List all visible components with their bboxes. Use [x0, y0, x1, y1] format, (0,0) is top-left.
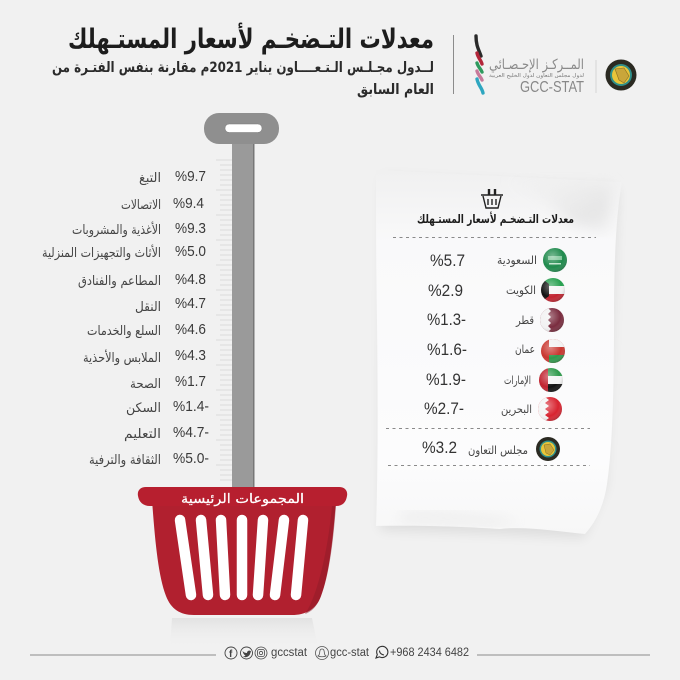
row: GCC total: مجلس التعاون — [468, 443, 528, 458]
phone number: +968 2434 6482 — [390, 647, 469, 659]
row: restaurants: %4.8 — [175, 271, 206, 288]
divider top — [393, 236, 596, 238]
row: communications: الاتصالات — [121, 198, 161, 213]
footer — [30, 646, 650, 660]
row: transport: %4.7 — [175, 295, 206, 312]
row: culture and recreation: الثقافة والترفية — [89, 453, 161, 468]
basket — [138, 487, 347, 615]
row: Bahrain: البحرين — [501, 402, 532, 417]
subtitle line 2: العام السابق — [357, 82, 434, 98]
handle gccstat: gccstat — [271, 647, 308, 659]
row: health — [130, 373, 206, 392]
header divider — [453, 35, 454, 94]
basket reflection — [170, 618, 318, 648]
basket body — [152, 500, 336, 615]
row: clothing: %4.3 — [175, 347, 206, 364]
icon: twitter — [240, 647, 252, 659]
category list — [42, 168, 209, 468]
icon: ribbon — [476, 36, 483, 93]
logo divider — [596, 60, 597, 93]
row: food and beverages: الأغذية والمشروبات — [72, 221, 161, 238]
divider bottom — [388, 464, 590, 466]
row: Oman — [427, 339, 565, 363]
row: transport — [135, 295, 206, 315]
row: housing: %1.4- — [173, 398, 209, 415]
handle gcc-stat: gcc-stat — [330, 647, 370, 659]
row: culture and recreation: %5.0- — [173, 450, 209, 467]
row: Oman: عمان — [515, 342, 535, 356]
row: Saudi Arabia: %5.7 — [430, 251, 465, 270]
icon: snapchat — [316, 646, 328, 660]
title: معدلات التـضخـم لأسعار المستـهلك — [68, 22, 434, 55]
scale handle — [204, 113, 279, 488]
row: food and beverages: %9.3 — [175, 220, 206, 237]
logo GCC-STAT: GCC-STAT — [520, 79, 584, 96]
row: goods and services: السلع والخدمات — [87, 324, 161, 339]
row: Qatar — [427, 308, 564, 332]
row: clothing — [83, 347, 206, 366]
row: Saudi Arabia: السعودية — [497, 253, 537, 268]
ruler ticks — [216, 160, 232, 480]
row: furniture: الأثاث والتجهيزات المنزلية — [42, 244, 161, 261]
row: communications: %9.4 — [173, 195, 204, 212]
logo sub name: لدول مجلس التعاون لدول الخليج العربية — [489, 73, 585, 79]
receipt paper — [376, 170, 622, 534]
icon: basket — [481, 189, 503, 208]
row: education: التعليم — [124, 427, 161, 442]
row: goods and services: %4.6 — [175, 321, 206, 338]
row: goods and services — [87, 321, 206, 339]
row: tobacco — [139, 168, 206, 186]
row: communications — [121, 195, 204, 213]
receipt title: معدلات التـضخـم لأسعار المستـهلك — [417, 211, 574, 226]
row: tobacco: %9.7 — [175, 168, 206, 185]
row: education — [124, 424, 209, 442]
row: clothing: الملابس والأحذية — [83, 349, 161, 366]
row: furniture: %5.0 — [175, 243, 206, 260]
divider middle — [386, 428, 590, 430]
row: restaurants — [78, 271, 206, 289]
row: culture and recreation — [89, 450, 209, 468]
header title block — [52, 22, 434, 98]
icon: GCC emblem — [606, 60, 636, 90]
icon: instagram — [255, 647, 267, 659]
receipt top fold shade — [500, 178, 612, 232]
basket rim — [138, 487, 347, 506]
icon: whatsapp — [376, 646, 388, 658]
row: Qatar: %1.3- — [427, 310, 466, 329]
row: Qatar: قطر — [515, 313, 534, 328]
row: Bahrain — [424, 397, 562, 421]
footer line right — [477, 654, 650, 656]
row: Bahrain: %2.7- — [424, 399, 464, 418]
basket label: المجموعات الرئيسية — [181, 492, 304, 507]
panel: receipt — [376, 170, 622, 538]
row: transport: النقل — [135, 300, 161, 315]
row: Kuwait — [428, 278, 565, 302]
row: Kuwait: %2.9 — [428, 281, 463, 300]
row: food and beverages — [72, 220, 206, 238]
row: GCC total — [422, 437, 560, 461]
receipt bottom fold shade — [400, 512, 520, 526]
row: housing — [126, 398, 209, 416]
basket shadow right — [305, 506, 336, 614]
icon: facebook — [225, 647, 237, 660]
row: education: %4.7- — [173, 424, 209, 441]
icon: facebook: f — [229, 649, 233, 660]
row: Kuwait: الكويت — [506, 283, 536, 298]
row: Saudi Arabia — [430, 248, 567, 272]
logo arabic name: المــركـز الإحـصـائي — [489, 57, 584, 73]
basket slots — [180, 520, 303, 595]
row: Oman: %1.6- — [427, 340, 467, 359]
logo: GCC-STAT — [476, 36, 585, 96]
row: UAE: %1.9- — [426, 370, 466, 389]
row: housing: السكن — [126, 401, 161, 416]
row: UAE — [426, 368, 563, 392]
row: health: الصحة — [130, 377, 161, 392]
footer line left — [30, 654, 216, 656]
subtitle line 1: لــدول مجـلـس الـتـعــــاون يناير 2021م مقارنة بنفس الفتـرة من — [52, 60, 434, 76]
row: GCC total: %3.2 — [422, 438, 457, 457]
row: health: %1.7 — [175, 373, 206, 390]
row: restaurants: المطاعم والفنادق — [78, 274, 161, 289]
receipt shadow — [380, 176, 618, 538]
row: tobacco: التبغ — [139, 171, 161, 186]
row: UAE: الإمارات — [504, 373, 531, 388]
